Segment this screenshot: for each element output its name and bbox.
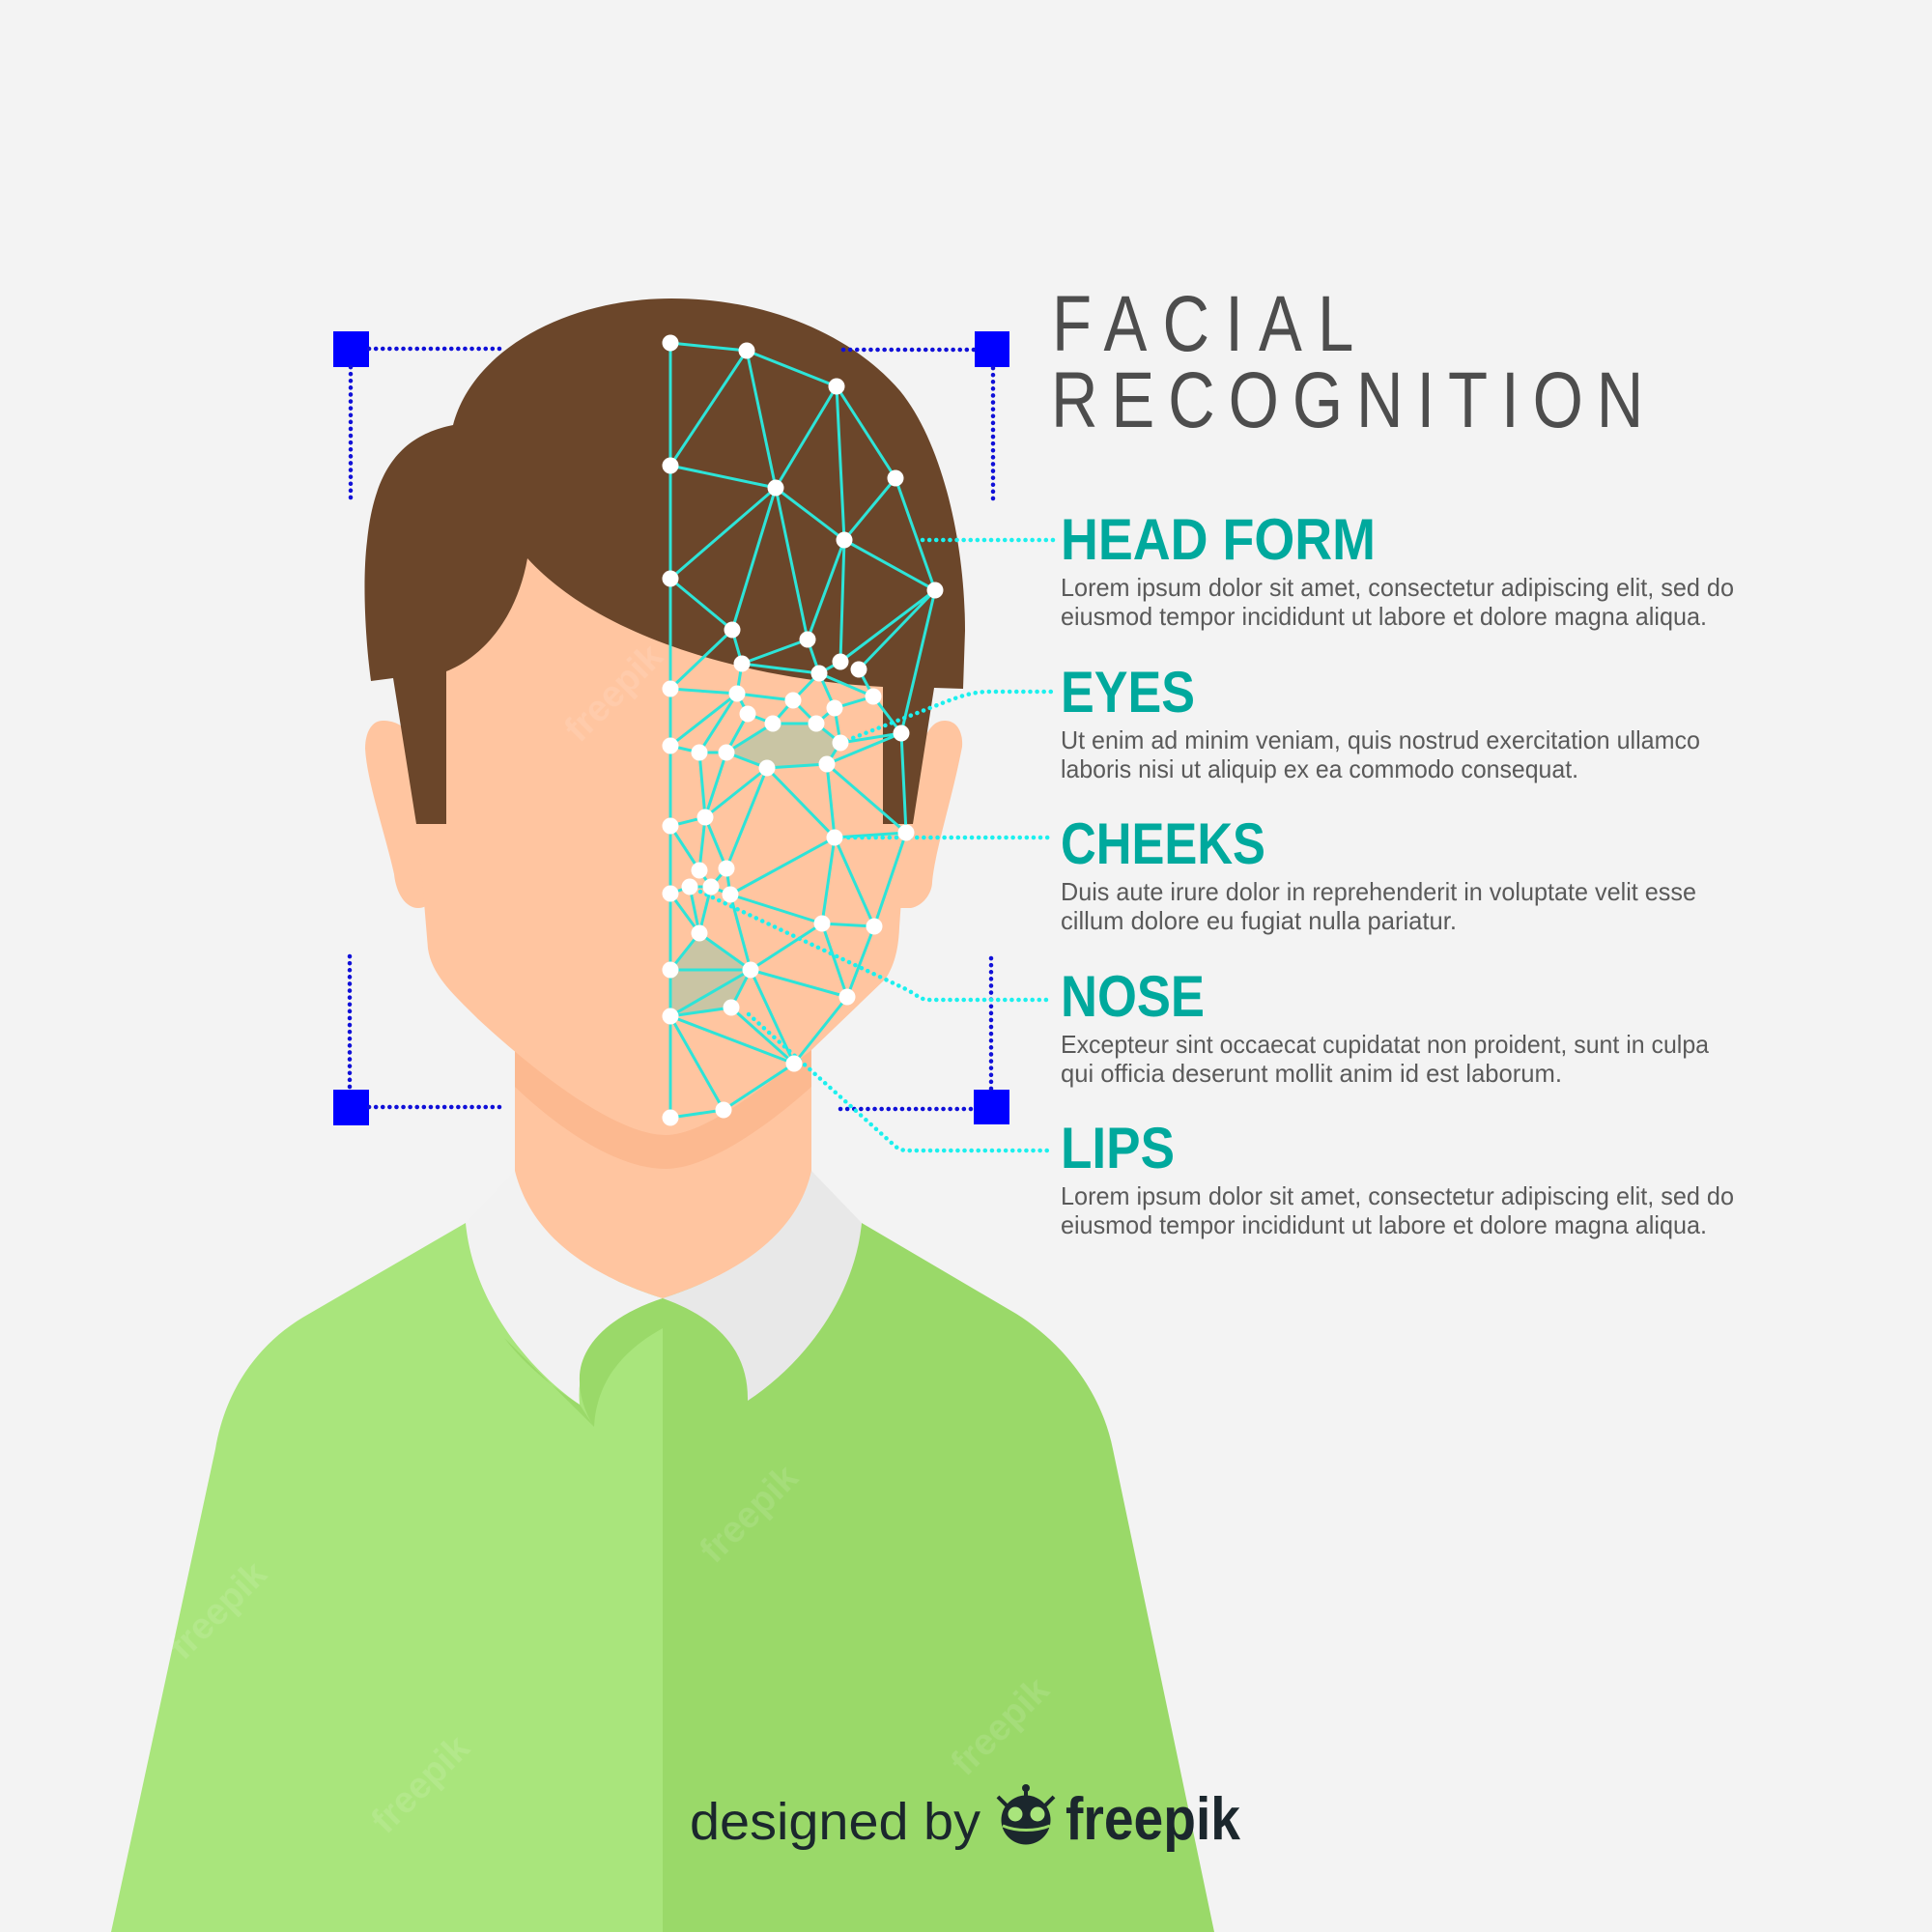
section: cheeks: Duis aute irure dolor in reprehenderit in voluptate velit esse [1061,877,1696,906]
section: nose: NOSE [1061,964,1205,1029]
section: head form: Lorem ipsum dolor sit amet, consectetur adipiscing elit, sed do [1061,573,1734,602]
leader: head form [923,538,1053,542]
bracket top left [333,331,502,499]
face mesh nodes [663,334,943,1126]
section: lips: Lorem ipsum dolor sit amet, consectetur adipiscing elit, sed do [1061,1181,1734,1210]
collar underside shade [504,1338,594,1427]
sweater left [111,1223,663,1932]
leader: cheeks [835,836,1051,839]
watermarks: freepik [693,1457,807,1571]
section: head form: HEAD FORM [1061,507,1376,572]
section: head form: eiusmod tempor incididunt ut labore et dolore magna aliqua. [1061,602,1707,631]
section: cheeks [1061,811,1696,935]
title [1051,279,1643,443]
designed by freepik logo: designed by [690,1793,980,1851]
bracket top right [843,331,1009,499]
leader: lips [749,1014,1051,1151]
eye highlight [726,724,840,768]
section: nose: qui officia deserunt mollit anim id est laborum. [1061,1059,1562,1088]
collar knot shade [580,1298,663,1427]
neck [515,1014,811,1298]
leader: eyes [840,692,1053,743]
hair [364,298,965,824]
blue corner brackets [333,331,1009,1125]
watermarks [161,636,1058,1841]
collar right [663,1171,862,1401]
section: eyes: Ut enim ad minim veniam, quis nostrud exercitation ullamco [1061,725,1700,754]
section: lips [1061,1116,1734,1239]
person illustration [111,298,1214,1932]
face mesh lines [670,343,935,1118]
collar left [466,1171,663,1405]
left ear [365,721,435,908]
face [417,483,906,1135]
title: RECOGNITION [1051,355,1643,443]
watermarks: freepik [364,1727,478,1841]
neck shadow [515,1048,811,1169]
section: nose: Excepteur sint occaecat cupidatat non proident, sunt in culpa [1061,1030,1710,1059]
designed by freepik logo: freepik [1065,1786,1240,1853]
right ear [894,721,962,908]
section: lips: eiusmod tempor incididunt ut labore et dolore magna aliqua. [1061,1210,1707,1239]
bracket bottom right [840,958,1009,1124]
leader: nose [700,892,1048,1000]
sweater right [663,1223,1214,1932]
watermarks: freepik [161,1553,275,1667]
bracket bottom left [333,956,500,1125]
section: eyes [1061,660,1700,783]
section: nose [1061,964,1710,1088]
section: cheeks: cillum dolore eu fugiat nulla pariatur. [1061,906,1457,935]
section: cheeks: CHEEKS [1061,811,1265,876]
icon: freepik mascot [998,1784,1054,1845]
section: eyes: laboris nisi ut aliquip ex ea commodo consequat. [1061,754,1578,783]
cyan dotted leader lines [700,540,1053,1151]
lips highlight [670,933,751,1016]
title: FACIAL [1052,279,1353,367]
section: eyes: EYES [1061,660,1195,724]
designed by freepik logo [690,1784,1240,1853]
watermarks: freepik [557,636,671,750]
section: head form [1061,507,1734,631]
section: lips: LIPS [1061,1116,1175,1180]
watermarks: freepik [944,1669,1058,1783]
